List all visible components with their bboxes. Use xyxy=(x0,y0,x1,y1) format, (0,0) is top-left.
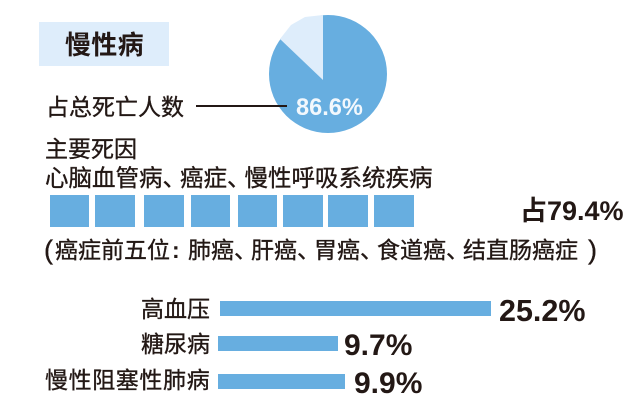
text: causes list: 心脑血管病、癌症、慢性呼吸系统疾病 xyxy=(45,165,432,191)
text: cancer list: 肺癌、肝癌、胃癌、食道癌、结直肠癌症 xyxy=(188,237,578,263)
text: top five prefix: 癌症前五位 xyxy=(55,237,170,263)
pie value: 86.6% xyxy=(296,95,363,121)
colon: : xyxy=(172,237,180,263)
heading: main causes: 主要死因 xyxy=(45,136,137,162)
pie chart xyxy=(269,15,387,133)
leader line xyxy=(196,105,287,107)
pictogram squares xyxy=(50,195,414,227)
bar: COPD xyxy=(218,374,345,389)
title: 慢性病 xyxy=(65,30,144,60)
label: COPD: 慢性阻塞性肺病 xyxy=(45,367,210,393)
text: top five cancers xyxy=(44,235,597,265)
closing bracket: ) xyxy=(588,235,597,265)
opening bracket: ( xyxy=(44,235,53,265)
value: 9.9%: 9.9% xyxy=(354,367,422,400)
bar: diabetes xyxy=(218,336,338,351)
value: 79.4%: 占79.4% xyxy=(520,196,624,226)
value: 9.7%: 9.7% xyxy=(344,329,412,362)
label: hypertension: 高血压 xyxy=(141,296,210,322)
label: share of deaths: 占总死亡人数 xyxy=(46,94,184,120)
label: diabetes: 糖尿病 xyxy=(141,331,210,357)
bar: hypertension xyxy=(220,301,491,316)
title box xyxy=(39,22,169,66)
value: 25.2%: 25.2% xyxy=(499,294,585,328)
